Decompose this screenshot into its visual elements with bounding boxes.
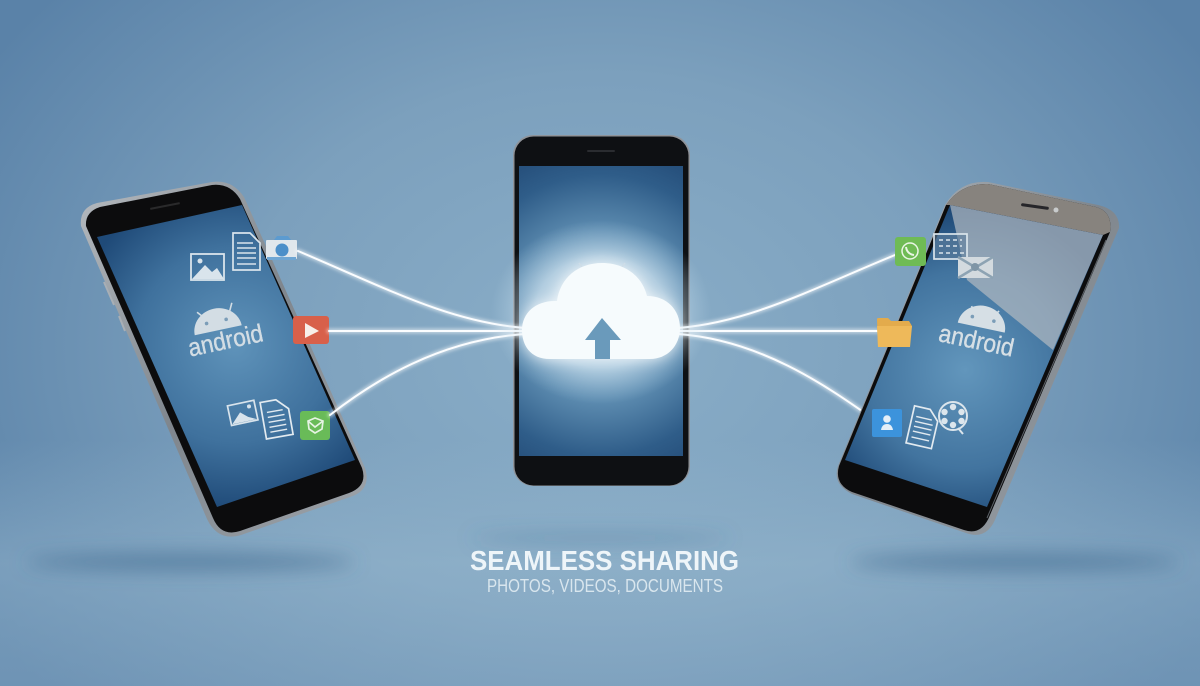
left phone screen [97,205,355,507]
icon: right document card [934,234,967,259]
right phone inner edge line [987,240,1106,518]
right phone [837,182,1119,535]
subtitle: PHOTOS, VIDEOS, DOCUMENTS [487,576,723,596]
left phone body [81,182,367,537]
android wordmark: android [936,319,1016,363]
right phone screen [845,205,1103,507]
left phone [81,182,367,537]
upload arrow [585,318,621,359]
android head [190,304,242,335]
icon: video play badge [293,316,329,344]
android logo right [936,298,1021,363]
android logo left [181,298,266,363]
cloud upload icon [491,220,711,404]
icon: green mail badge [300,411,330,440]
icon: lower right document [906,406,940,449]
right phone glare [950,205,1103,350]
centre phone body [513,135,690,486]
left phone side buttons [104,282,125,331]
floor shadows [25,533,1180,571]
android wordmark: android [186,319,266,363]
connector lines [298,251,895,418]
centre phone speaker [587,150,615,152]
centre phone [513,135,690,486]
icon: lower left document [260,398,293,439]
icon: envelope [958,257,993,278]
icon: contact badge [872,409,902,437]
left phone speaker [150,202,180,210]
icon: folder [877,318,912,347]
right phone top bezel reflection [946,184,1110,235]
right phone camera dot [1054,208,1058,212]
android antennae behind cloud [579,263,625,270]
icon: lower left picture [227,400,258,425]
icon: green phone badge [895,237,926,266]
icon: film reel [939,402,967,434]
title: SEAMLESS SHARING [470,545,739,576]
cloud glow [491,220,711,404]
android head [958,301,1009,333]
centre phone screen [519,166,683,456]
cloud shape [522,263,680,359]
icon: left document [233,233,260,270]
icon: left picture frame [191,254,224,280]
right phone speaker [1021,203,1049,210]
right phone body [837,182,1119,535]
icon: camera [266,236,297,260]
